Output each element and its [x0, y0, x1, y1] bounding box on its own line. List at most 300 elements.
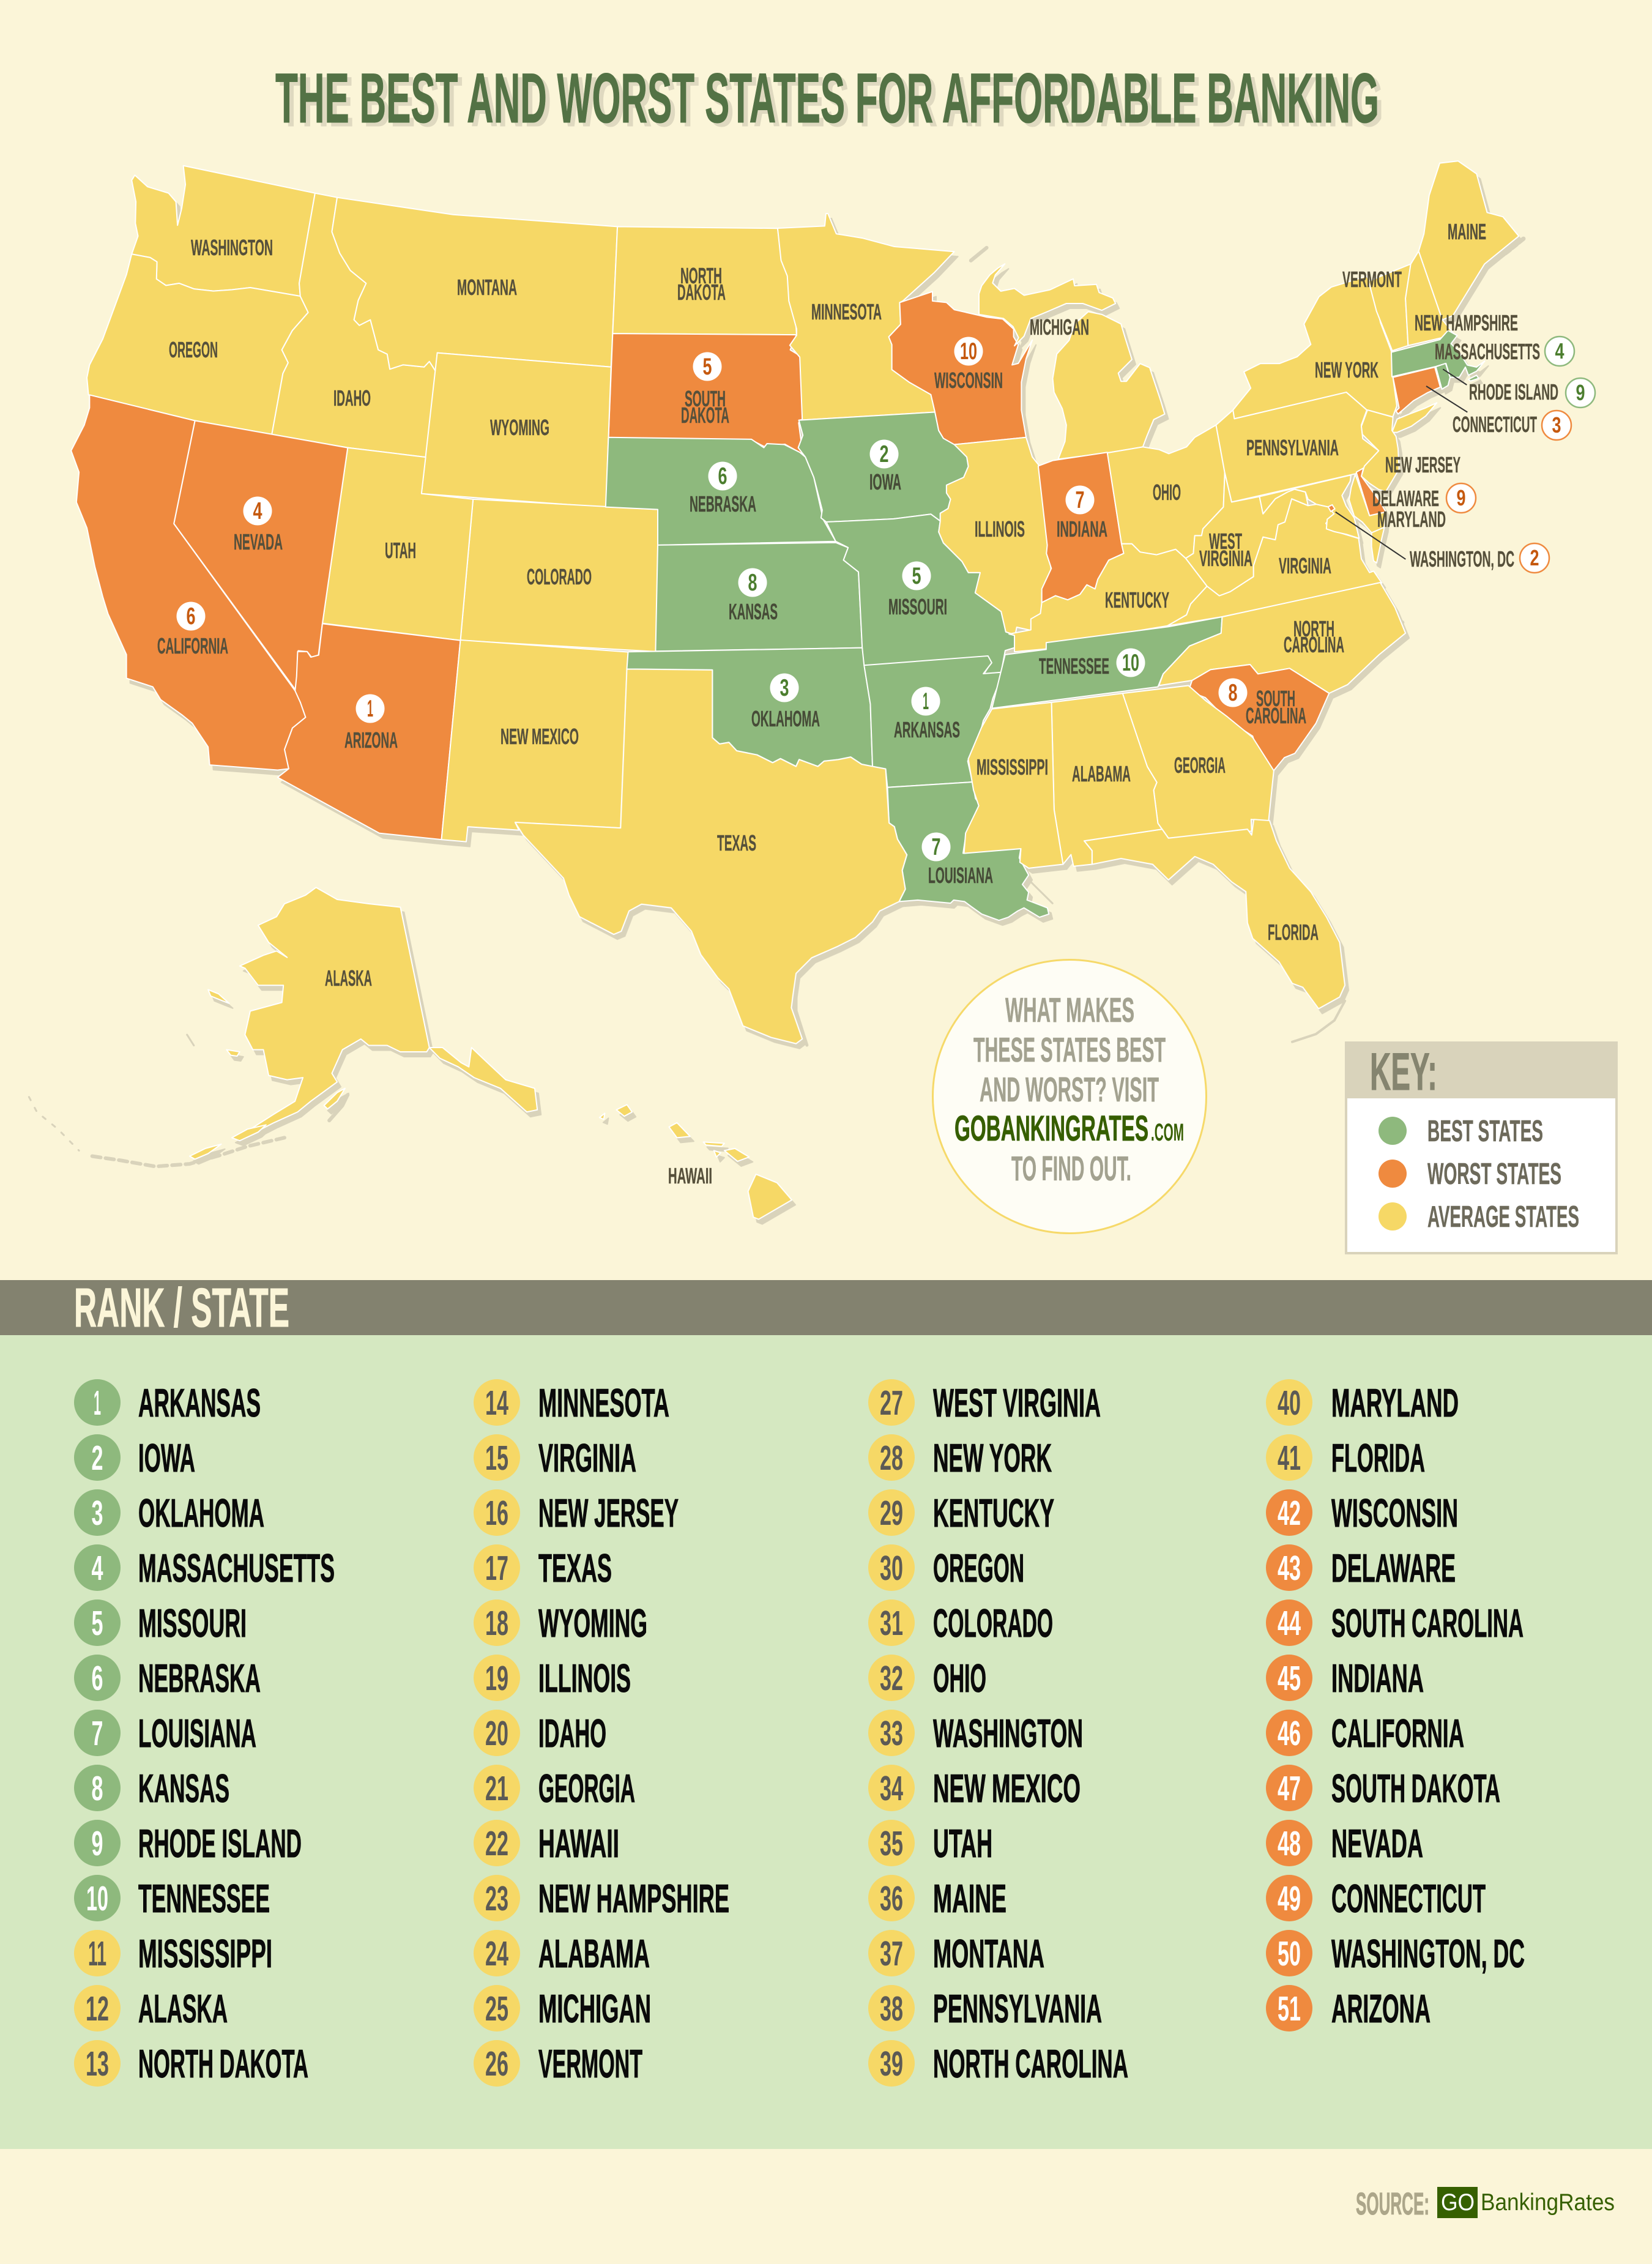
state: Mississippi [964, 702, 1063, 868]
rank 21 [474, 1765, 635, 1811]
badge: Nebraska 6: 6 [718, 463, 727, 490]
rank 29: 29 [880, 1494, 903, 1533]
rank 4: 4 [92, 1549, 103, 1588]
state: Pennsylvania [1216, 392, 1379, 502]
rank 11: 11 [88, 1934, 106, 1973]
label: Maryland: MARYLAND [1377, 507, 1446, 532]
label: South Dakota [681, 386, 729, 428]
callout: what makes these states best and worst [932, 959, 1207, 1234]
state: Alaska [190, 887, 537, 1159]
rank 17 [474, 1544, 612, 1591]
callout: what makes these states best and worst: WHAT MAKES [1005, 991, 1134, 1030]
label: North Carolina: NORTH [1293, 616, 1334, 641]
rank 4 [74, 1544, 335, 1591]
rank 27: WEST VIRGINIA [933, 1380, 1101, 1425]
rank 21: 21 [485, 1769, 508, 1808]
rank 17: TEXAS [538, 1546, 612, 1590]
map: small islands and keys [29, 238, 1524, 1166]
label: Kansas: KANSAS [729, 599, 778, 624]
rank 44: 44 [1278, 1604, 1301, 1643]
label: South Carolina: SOUTH [1256, 686, 1295, 711]
rank 12 [74, 1985, 228, 2031]
rank 46: CALIFORNIA [1331, 1711, 1464, 1756]
key: average states [1379, 1201, 1579, 1234]
label: Rhode Island: RHODE ISLAND [1469, 379, 1558, 404]
state: North Carolina [1159, 583, 1405, 693]
label: South Dakota: DAKOTA [681, 403, 729, 428]
label: West Virginia: WEST [1209, 529, 1242, 554]
rank 22: 22 [485, 1824, 508, 1863]
rank 10: TENNESSEE [138, 1876, 270, 1921]
rank 14 [474, 1379, 669, 1426]
label: North Dakota [677, 263, 726, 305]
rank 42: WISCONSIN [1331, 1491, 1458, 1535]
badge: Indiana 7 [1066, 486, 1094, 514]
rank 33: 33 [880, 1714, 903, 1753]
label: Iowa: IOWA [869, 469, 901, 494]
rank 2: 2 [92, 1439, 103, 1478]
state: California [71, 395, 305, 770]
state: Illinois [939, 438, 1051, 635]
state: South Dakota [608, 333, 805, 455]
state: Oklahoma [627, 648, 873, 767]
label: Oklahoma: OKLAHOMA [751, 706, 820, 731]
rank 19: 19 [485, 1659, 508, 1698]
badge: Oklahoma 3: 3 [779, 675, 789, 701]
label: Colorado: COLORADO [527, 564, 592, 589]
label: Texas: TEXAS [717, 830, 756, 855]
leader lines [1336, 369, 1467, 559]
rank 9 [74, 1820, 302, 1866]
badge: Washington DC 2: 2 [1530, 545, 1539, 570]
rank 43: 43 [1278, 1549, 1301, 1588]
rank 51 [1266, 1985, 1431, 2031]
state: New York [1233, 276, 1437, 433]
rank 7: LOUISIANA [138, 1711, 256, 1756]
label: Pennsylvania: PENNSYLVANIA [1246, 435, 1339, 460]
rank 44 [1266, 1599, 1524, 1646]
rank 20 [474, 1710, 606, 1756]
rank 11 [74, 1930, 272, 1976]
rank 50: 50 [1278, 1934, 1301, 1973]
label: Washington, DC: WASHINGTON, DC [1410, 546, 1514, 572]
rank 23: NEW HAMPSHIRE [538, 1876, 729, 1921]
rank 33 [868, 1710, 1083, 1756]
rank 31: COLORADO [933, 1601, 1053, 1645]
rank 40: MARYLAND [1331, 1380, 1459, 1425]
state: Rhode Island [1436, 363, 1450, 389]
state: Virginia [1167, 499, 1385, 626]
state: Colorado [461, 499, 658, 652]
rank 39 [868, 2040, 1128, 2087]
rank 5: MISSOURI [138, 1601, 247, 1645]
badge: Rhode Island 9: 9 [1576, 380, 1585, 405]
rank 2 [74, 1434, 195, 1481]
rank 37 [868, 1930, 1044, 1976]
rank 21: GEORGIA [538, 1766, 635, 1811]
label: Arkansas: ARKANSAS [894, 717, 960, 742]
rank 4: MASSACHUSETTS [138, 1546, 335, 1590]
badge: Nevada 4: 4 [253, 498, 262, 524]
state: Louisiana [888, 782, 1049, 920]
rank 32: OHIO [933, 1656, 986, 1700]
state: Idaho [272, 193, 436, 457]
state: Delaware [1356, 468, 1386, 516]
state: Washington DC [1328, 505, 1335, 512]
label: Arizona: ARIZONA [344, 728, 398, 753]
label: Massachusetts: MASSACHUSETTS [1435, 339, 1540, 364]
label: North Carolina: CAROLINA [1284, 632, 1344, 657]
rank 2: IOWA [138, 1435, 195, 1480]
label: Louisiana: LOUISIANA [928, 863, 993, 888]
label: New Jersey: NEW JERSEY [1385, 452, 1460, 477]
rank 47: 47 [1278, 1769, 1301, 1808]
rank 19 [474, 1655, 631, 1701]
rank 6: 6 [92, 1659, 103, 1698]
label: North Dakota: DAKOTA [677, 280, 726, 305]
rank 40 [1266, 1379, 1459, 1426]
label: Maine: MAINE [1448, 219, 1486, 244]
rank 12: ALASKA [138, 1986, 228, 2031]
rank 38: PENNSYLVANIA [933, 1986, 1102, 2031]
badge: South Dakota 5: 5 [702, 354, 712, 380]
label: Delaware: DELAWARE [1372, 486, 1439, 511]
rank 28: 28 [880, 1439, 903, 1478]
callout: what makes these states best and worst: .COM [1151, 1119, 1184, 1146]
badge: Louisiana 7 [921, 832, 951, 862]
rank 14: MINNESOTA [538, 1380, 669, 1425]
rank 30: 30 [880, 1549, 903, 1588]
label: Illinois: ILLINOIS [975, 516, 1025, 542]
rank 3: OKLAHOMA [138, 1491, 264, 1535]
label: Virginia: VIRGINIA [1279, 553, 1331, 578]
callout: what makes these states best and worst: THESE STATES BEST [973, 1030, 1166, 1070]
rank 20: IDAHO [538, 1711, 606, 1756]
rank 8 [74, 1765, 229, 1811]
badge: Wisconsin 10 [954, 337, 983, 366]
badge: Indiana 7: 7 [1076, 487, 1084, 513]
badge: South Carolina 8: 8 [1229, 680, 1237, 706]
label: Wisconsin: WISCONSIN [934, 368, 1003, 393]
rank 13: 13 [86, 2044, 109, 2083]
rank 30: OREGON [933, 1546, 1024, 1590]
rank 31 [868, 1599, 1053, 1646]
rank 34 [868, 1765, 1081, 1811]
rank 40: 40 [1278, 1383, 1301, 1423]
state: Montana [332, 198, 617, 371]
badge: Kansas 8 [738, 568, 767, 597]
rank 42: 42 [1278, 1494, 1301, 1533]
state: Minnesota [778, 214, 954, 420]
state: Nevada [174, 420, 348, 691]
state: Indiana [1038, 452, 1124, 603]
map labels [157, 219, 1558, 1188]
badge: Arizona 1: 1 [367, 696, 373, 722]
badge: Arkansas 1: 1 [923, 688, 929, 715]
state: Maine [1419, 161, 1519, 320]
rank 23 [474, 1875, 729, 1921]
rank 38 [868, 1985, 1102, 2031]
badge: Connecticut 3 [1542, 411, 1571, 440]
rank 36 [868, 1875, 1006, 1921]
label: Alabama: ALABAMA [1072, 761, 1131, 786]
rank 10: 10 [86, 1879, 108, 1918]
state: Connecticut [1393, 367, 1440, 414]
label: Utah: UTAH [385, 538, 416, 563]
state: Missouri [827, 514, 1015, 674]
rank 9: RHODE ISLAND [138, 1821, 302, 1866]
label: West Virginia: VIRGINIA [1199, 546, 1252, 571]
state: Arkansas [864, 656, 1003, 788]
map: state shapes [71, 161, 1519, 1220]
state: Oregon [87, 254, 308, 434]
rank 10 [74, 1875, 270, 1921]
rank 37: 37 [880, 1934, 903, 1973]
badge: Nebraska 6 [709, 461, 737, 491]
rank 18: WYOMING [538, 1601, 647, 1645]
label: Nevada: NEVADA [234, 529, 283, 554]
rank 7 [74, 1710, 256, 1756]
rank 28: NEW YORK [933, 1435, 1052, 1480]
rank 35: 35 [880, 1824, 903, 1863]
rank 51: ARIZONA [1331, 1986, 1431, 2031]
badge: Wisconsin 10: 10 [960, 338, 977, 365]
badge: Arizona 1 [356, 694, 384, 723]
badge: Oklahoma 3 [770, 673, 799, 702]
state: Kentucky [1009, 544, 1207, 652]
label: North Carolina [1284, 616, 1344, 657]
badge: Rhode Island 9 [1566, 378, 1595, 408]
badge: Iowa 2: 2 [880, 441, 888, 467]
rank 26: 26 [485, 2044, 508, 2083]
rank 1: 1 [94, 1383, 101, 1423]
rank 7: 7 [92, 1714, 103, 1753]
rank 49: CONNECTICUT [1331, 1876, 1486, 1921]
rank 15: VIRGINIA [538, 1435, 636, 1480]
rank 43 [1266, 1544, 1456, 1591]
badge: Missouri 5: 5 [912, 563, 921, 589]
rank 16: NEW JERSEY [538, 1491, 679, 1535]
badge: Delaware 9 [1446, 483, 1476, 513]
key: best states: BEST STATES [1427, 1115, 1543, 1148]
label: West Virginia [1199, 529, 1252, 571]
state: Nebraska [606, 438, 836, 545]
label: South Carolina [1246, 686, 1306, 728]
state: West Virginia [1186, 473, 1308, 596]
key panel: KEY: [1370, 1043, 1437, 1101]
label: Vermont: VERMONT [1342, 267, 1402, 292]
badge: Delaware 9: 9 [1456, 485, 1466, 510]
map labels: OREGON [169, 337, 218, 362]
callout: what makes these states best and worst: TO FIND OUT. [1011, 1149, 1131, 1188]
rank 36: 36 [880, 1879, 903, 1918]
label: Connecticut: CONNECTICUT [1453, 412, 1537, 437]
rank 34: 34 [880, 1769, 903, 1808]
state: Maryland [1259, 474, 1386, 538]
state: North Dakota [612, 226, 797, 335]
source attribution: SOURCE: [1356, 2186, 1429, 2221]
state: Washington [132, 166, 315, 296]
rank 41 [1266, 1434, 1425, 1481]
label: Hawaii: HAWAII [668, 1163, 712, 1188]
state: Massachusetts [1391, 330, 1485, 381]
rank 27: 27 [880, 1383, 903, 1423]
rank 27 [868, 1379, 1101, 1426]
rank 15 [474, 1434, 636, 1481]
badge: Connecticut 3: 3 [1552, 412, 1561, 438]
rank 47 [1266, 1765, 1500, 1811]
rank 11: MISSISSIPPI [138, 1931, 272, 1976]
rank 36: MAINE [933, 1876, 1006, 1921]
label: Indiana: INDIANA [1057, 516, 1107, 542]
rank 16: 16 [485, 1494, 508, 1533]
label: Kentucky: KENTUCKY [1105, 587, 1169, 613]
rank 26: VERMONT [538, 2041, 642, 2086]
rank 8: KANSAS [138, 1766, 229, 1811]
state: Georgia [1123, 685, 1274, 838]
state: Vermont [1369, 264, 1411, 351]
rank 24: ALABAMA [538, 1931, 650, 1976]
key: worst states [1379, 1158, 1561, 1191]
state: Tennessee [992, 617, 1222, 709]
rank 12: 12 [86, 1989, 109, 2028]
rank 50 [1266, 1930, 1525, 1976]
rank 3 [74, 1489, 264, 1536]
rank 48: NEVADA [1331, 1821, 1423, 1866]
label: Minnesota: MINNESOTA [811, 299, 882, 324]
badge: Nevada 4 [244, 497, 272, 525]
rank 18: 18 [485, 1604, 508, 1643]
badge: Arkansas 1 [912, 687, 940, 716]
rank badges on map [176, 337, 1595, 862]
key: best states [1379, 1115, 1543, 1148]
badge: Tennessee 10: 10 [1122, 650, 1139, 676]
rank 41: 41 [1278, 1439, 1301, 1478]
state: Ohio [1107, 425, 1225, 558]
rank 3: 3 [92, 1494, 103, 1533]
badge: California 6: 6 [186, 603, 196, 630]
rank 25: MICHIGAN [538, 1986, 651, 2031]
rank 8: 8 [92, 1769, 103, 1808]
rank 46 [1266, 1710, 1464, 1756]
state: Hawaii [600, 1104, 792, 1220]
rank 29: KENTUCKY [933, 1491, 1054, 1535]
rank 1 [74, 1379, 261, 1426]
label: Michigan: MICHIGAN [1030, 315, 1089, 340]
rank header band: RANK / STATE [74, 1278, 289, 1339]
state: Alabama [1052, 693, 1162, 866]
badge: Tennessee 10 [1116, 649, 1145, 677]
label: New York: NEW YORK [1315, 357, 1379, 382]
rank 5 [74, 1599, 247, 1646]
state: South Carolina [1188, 665, 1329, 770]
rank 45: INDIANA [1331, 1656, 1424, 1700]
rank 39: NORTH CAROLINA [933, 2041, 1128, 2086]
label: Tennessee: TENNESSEE [1039, 654, 1109, 679]
rank 24 [474, 1930, 650, 1976]
badge: California 6 [176, 602, 206, 630]
label: Nebraska: NEBRASKA [690, 491, 756, 516]
state: Arizona [278, 624, 461, 840]
rank 22: HAWAII [538, 1821, 619, 1866]
map labels: GEORGIA [1174, 753, 1226, 778]
rank 33: WASHINGTON [933, 1711, 1083, 1756]
rank 28 [868, 1434, 1052, 1481]
rank 38: 38 [880, 1989, 903, 2028]
rank 51: 51 [1278, 1989, 1301, 2028]
rank panel [0, 1335, 1652, 2149]
rank 25: 25 [485, 1989, 508, 2028]
state: Michigan [979, 264, 1165, 459]
rank 13 [74, 2040, 308, 2087]
badge: Iowa 2 [870, 439, 898, 469]
rank 19: ILLINOIS [538, 1656, 631, 1700]
badge: Kansas 8: 8 [748, 570, 757, 596]
rank 32: 32 [880, 1659, 903, 1698]
rank 41: FLORIDA [1331, 1435, 1425, 1480]
state: New Hampshire [1405, 251, 1453, 346]
label: South Carolina: CAROLINA [1246, 703, 1306, 728]
rank 43: DELAWARE [1331, 1546, 1456, 1590]
label: Montana: MONTANA [457, 275, 517, 300]
state: New Jersey [1361, 410, 1399, 491]
rank 6 [74, 1655, 261, 1701]
rank 48: 48 [1278, 1824, 1301, 1863]
key panel [1345, 1041, 1618, 1253]
badge: South Carolina 8 [1219, 678, 1247, 707]
logo: BankingRates: BankingRates [1481, 2189, 1615, 2216]
rank 22 [474, 1820, 619, 1866]
rank 26 [474, 2040, 642, 2087]
state: Wisconsin [889, 292, 1032, 445]
rank 32 [868, 1655, 986, 1701]
rank 15: 15 [485, 1439, 508, 1478]
rank 34: NEW MEXICO [933, 1766, 1081, 1811]
map labels: OHIO [1153, 480, 1181, 505]
rank 18 [474, 1599, 647, 1646]
label: Washington: WASHINGTON [191, 235, 273, 260]
callout: what makes these states best and worst: AND WORST? VISIT [980, 1070, 1159, 1109]
rank 42 [1266, 1489, 1458, 1536]
logo: GO box: GO [1441, 2189, 1475, 2216]
badge: Missouri 5 [902, 562, 931, 590]
state: Iowa [798, 412, 969, 522]
rank 29 [868, 1489, 1054, 1536]
label: New Hampshire: NEW HAMPSHIRE [1415, 310, 1518, 335]
rank 45 [1266, 1655, 1424, 1701]
rank 48 [1266, 1820, 1423, 1866]
badge: Massachusetts 4: 4 [1555, 338, 1564, 363]
label: South Dakota: SOUTH [685, 386, 726, 411]
label: Wyoming: WYOMING [490, 415, 549, 440]
rank 20: 20 [485, 1714, 508, 1753]
rank 17: 17 [485, 1549, 508, 1588]
label: Missouri: MISSOURI [888, 594, 947, 619]
label: California: CALIFORNIA [157, 633, 228, 658]
badge: Washington DC 2 [1520, 543, 1549, 573]
rank header band [0, 1278, 1652, 1339]
rank 24: 24 [485, 1934, 508, 1973]
rank 9: 9 [92, 1824, 103, 1863]
rank 30 [868, 1544, 1024, 1591]
rank 16 [474, 1489, 679, 1536]
label: Mississippi: MISSISSIPPI [977, 754, 1048, 780]
rank 39: 39 [880, 2044, 903, 2083]
badge: Massachusetts 4 [1545, 337, 1574, 366]
rank 5: 5 [92, 1604, 103, 1643]
rank 31: 31 [880, 1604, 903, 1643]
state: Texas [515, 669, 907, 1044]
